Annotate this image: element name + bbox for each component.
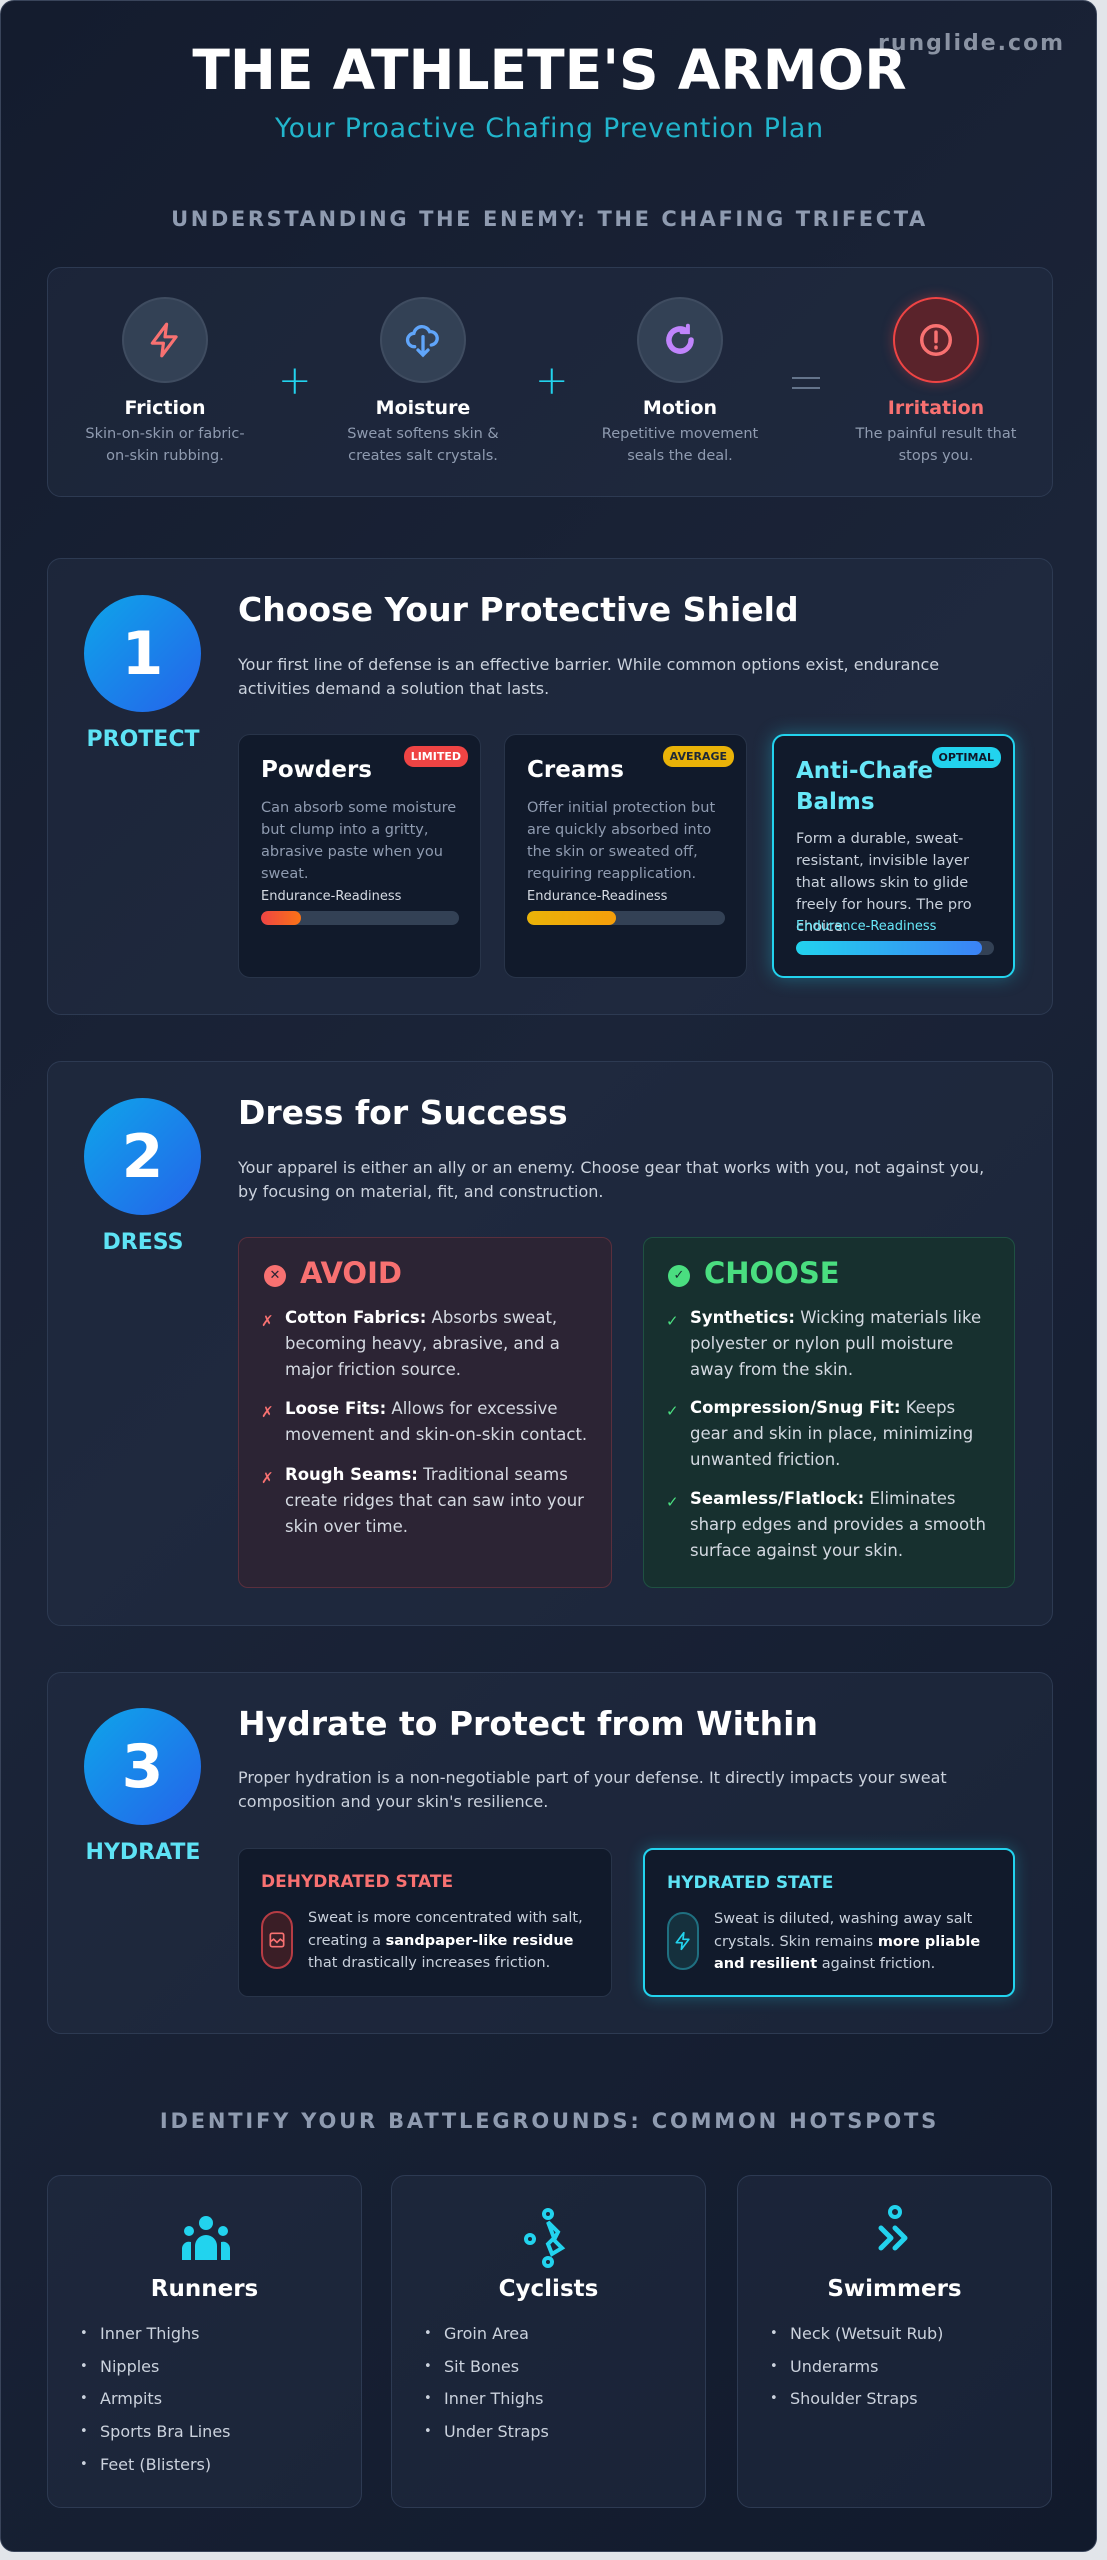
icon: x circle: ✕ (270, 1268, 280, 1283)
step number 3 (84, 1708, 201, 1825)
panel: section 3 hydrate (47, 1672, 1053, 2034)
label: PROTECT: PROTECT (87, 727, 199, 752)
irritation (855, 290, 1016, 464)
plus: + (278, 358, 312, 404)
card: cyclists: Groin Area (444, 2324, 529, 2343)
irritation: Irritation (888, 397, 984, 419)
box: choose: Compression/Snug Fit: Keeps gear and skin in place, minimizing unwanted friction. (690, 1398, 973, 1469)
icon: x circle (264, 1265, 286, 1287)
equals (792, 377, 820, 389)
card: powders: Powders (261, 757, 372, 783)
icon: runners group (182, 2216, 230, 2260)
box: hydrated: HYDRATED STATE (667, 1873, 833, 1893)
card: balms: Form a durable, sweat-resistant, invisible layer that allows skin to glide freely for hours. The pro choice. (796, 831, 972, 935)
card: powders (238, 734, 481, 978)
irritation: The painful result that (856, 426, 1016, 442)
step number 1 (84, 595, 201, 712)
card: runners: Runners (151, 2276, 258, 2302)
card: runners: Inner Thighs (100, 2324, 200, 2343)
card: runners: Sports Bra Lines (100, 2422, 230, 2441)
icon: check circle (668, 1265, 690, 1287)
card: creams: Offer initial protection but are quickly absorbed into the skin or sweated off, requiring reapplication. (527, 800, 715, 882)
badge optimal (932, 747, 1001, 768)
box: avoid (238, 1237, 612, 1588)
bar: balms (796, 941, 994, 955)
title: THE ATHLETE'S ARMOR (192, 38, 907, 102)
friction: Friction (124, 397, 206, 419)
heading: hotspots: IDENTIFY YOUR BATTLEGROUNDS: COMMON HOTSPOTS (160, 2109, 939, 2133)
moisture: Sweat softens skin & (347, 426, 499, 442)
step number 3: 3 (122, 1732, 163, 1802)
heading: hydrate: Hydrate to Protect from Within (238, 1704, 818, 1743)
heading: dress: Dress for Success (238, 1093, 568, 1132)
card: creams: Endurance-Readiness (527, 889, 667, 904)
panel: section 2 dress (47, 1061, 1053, 1626)
card: cyclists (391, 2175, 706, 2508)
card: runners: Nipples (100, 2357, 159, 2376)
friction: Skin-on-skin or fabric- (85, 426, 245, 442)
text: dress intro: Your apparel is either an ally or an enemy. Choose gear that works with you, not against you, by focusing on material, fit, and construction. (238, 1158, 984, 1201)
friction (85, 297, 245, 464)
box: avoid: ✗ (261, 1403, 274, 1421)
box: avoid: Loose Fits: Allows for excessive movement and skin-on-skin contact. (285, 1399, 587, 1444)
card: balms (772, 734, 1015, 978)
irritation: stops you. (899, 448, 973, 464)
card: balms: Endurance-Readiness (796, 919, 936, 934)
panel: trifecta (47, 267, 1053, 497)
box: dehydrated: DEHYDRATED STATE (261, 1872, 453, 1892)
icon: alert (893, 297, 979, 383)
motion: seals the deal. (627, 448, 733, 464)
panel: section 1 protect (47, 558, 1053, 1015)
icon: cyclist (524, 2208, 566, 2268)
icon: swimmer (878, 2205, 908, 2250)
card: runners: Armpits (100, 2389, 162, 2408)
card: balms: Anti-Chafe Balms (796, 758, 933, 815)
box: avoid: ✗ (261, 1312, 274, 1330)
card: creams (504, 734, 747, 978)
card: swimmers (737, 2175, 1052, 2508)
card: cyclists: Sit Bones (444, 2357, 519, 2376)
icon: check circle: ✓ (674, 1268, 684, 1283)
motion (602, 297, 758, 464)
box: avoid: Cotton Fabrics: Absorbs sweat, becoming heavy, abrasive, and a major friction source. (285, 1308, 560, 1379)
box: dehydrated: Sweat is more concentrated with salt, creating a sandpaper-like residue that drastically increases friction. (308, 1910, 583, 1971)
moisture: Moisture (376, 397, 470, 419)
motion: Motion (643, 397, 717, 419)
badge optimal: OPTIMAL (939, 751, 994, 764)
card: cyclists: Inner Thighs (444, 2389, 544, 2408)
card: cyclists: Cyclists (499, 2276, 598, 2302)
card: swimmers: Shoulder Straps (790, 2389, 918, 2408)
heading: chafing trifecta: UNDERSTANDING THE ENEMY: THE CHAFING TRIFECTA (171, 207, 928, 231)
heading AVOID: AVOID (300, 1256, 402, 1290)
bar: creams (527, 911, 725, 925)
icon: sandpaper (261, 1911, 293, 1969)
heading CHOOSE: CHOOSE (704, 1256, 840, 1290)
box: choose: ✓ (666, 1402, 679, 1420)
card: swimmers: Neck (Wetsuit Rub) (790, 2324, 943, 2343)
step number 2 (84, 1098, 201, 1215)
subtitle: Your Proactive Chafing Prevention Plan (275, 113, 824, 144)
box: hydrated: Sweat is diluted, washing away salt crystals. Skin remains more pliable and resilient against friction. (714, 1911, 980, 1972)
box: choose: Seamless/Flatlock: Eliminates sharp edges and provides a smooth surface against your skin. (690, 1489, 986, 1560)
icon: cloud drop (380, 297, 466, 383)
badge average: AVERAGE (670, 750, 727, 763)
icon: rotate (637, 297, 723, 383)
text: shield intro: Your first line of defense is an effective barrier. While common options exist, endurance activities demand a solution that lasts. (238, 655, 939, 698)
card: swimmers: Underarms (790, 2357, 878, 2376)
icon: lightning (122, 297, 208, 383)
box: choose (643, 1237, 1015, 1588)
bar: powders (261, 911, 459, 925)
watermark: runglide.com: runglide.com (878, 31, 1065, 56)
heading: choose shield: Choose Your Protective Shield (238, 590, 799, 629)
label: HYDRATE: HYDRATE (86, 1840, 200, 1865)
badge limited (404, 746, 468, 767)
card: runners (47, 2175, 362, 2508)
icon: bolt (667, 1912, 699, 1970)
card: runners: Feet (Blisters) (100, 2455, 211, 2474)
card: creams: Creams (527, 757, 624, 783)
friction: on-skin rubbing. (106, 448, 224, 464)
box: choose: ✓ (666, 1493, 679, 1511)
text: hydrate intro: Proper hydration is a non-negotiable part of your defense. It directly impacts your sweat composition and your skin's resilience. (238, 1768, 947, 1811)
plus: + (535, 358, 569, 404)
moisture (347, 297, 499, 464)
card: powders: Endurance-Readiness (261, 889, 401, 904)
box: choose: ✓ (666, 1312, 679, 1330)
moisture: creates salt crystals. (348, 448, 498, 464)
box: avoid: Rough Seams: Traditional seams create ridges that can saw into your skin over time. (285, 1465, 584, 1536)
motion: Repetitive movement (602, 426, 758, 442)
card: swimmers: Swimmers (827, 2276, 962, 2302)
box: dehydrated (238, 1848, 612, 1997)
label: DRESS: DRESS (103, 1230, 183, 1255)
box: choose: Synthetics: Wicking materials like polyester or nylon pull moisture away from the skin. (690, 1308, 981, 1379)
box: hydrated (643, 1848, 1015, 1997)
badge limited: LIMITED (411, 750, 461, 763)
step number 1: 1 (122, 618, 163, 688)
card: cyclists: Under Straps (444, 2422, 549, 2441)
card: powders: Can absorb some moisture but clump into a gritty, abrasive paste when you sweat. (261, 800, 456, 882)
box: avoid: ✗ (261, 1469, 274, 1487)
badge average (663, 746, 734, 767)
step number 2: 2 (122, 1122, 163, 1192)
